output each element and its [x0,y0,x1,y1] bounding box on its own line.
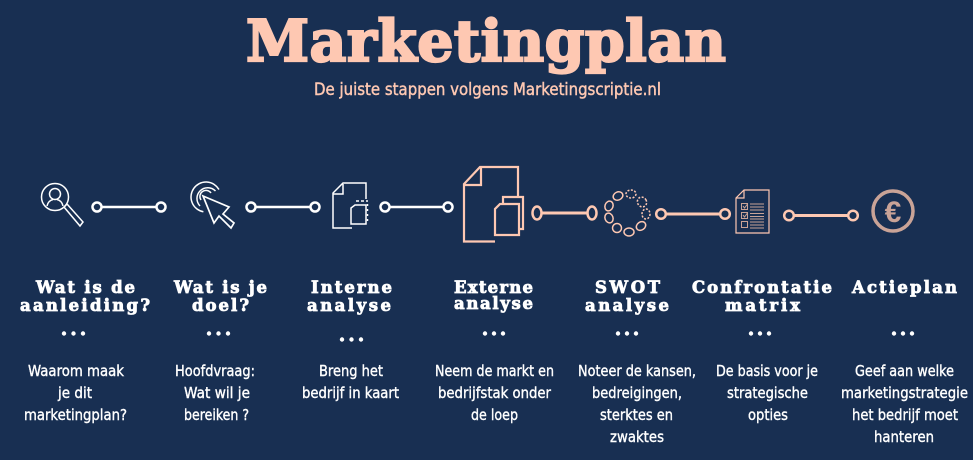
step 1 [20,278,150,424]
step 3: analyse [307,296,391,315]
connector 4 [532,206,596,220]
step 4 [435,278,554,424]
step 1: Wat is de [35,278,135,297]
step 6: Confrontatie [692,278,832,297]
step 1: je dit [57,384,92,402]
step 5 [578,278,696,446]
step 2: Hoofdvraag: [175,362,255,380]
step 3: bedrijf in kaart [302,384,399,402]
step 5: zwaktes [610,428,664,446]
step 4: Neem de markt en [435,362,554,380]
connector 1 [92,202,166,212]
step 1: Waarom maak [28,362,124,380]
connector 5 [656,209,730,219]
step 2: bereiken ? [184,406,249,424]
step 2: doel? [192,296,249,315]
icon: SWOT ring [604,190,650,236]
step 5: SWOT [595,278,661,297]
icon: euro coin [873,191,913,231]
step 3: Interne [311,278,392,297]
subtitle: De juiste stappen volgens Marketingscriptie.nl [314,80,661,99]
step 7 [841,278,968,446]
step 4: analyse [454,294,533,313]
step 5: analyse [585,296,669,315]
step 5: bedreigingen, [592,384,682,402]
step 2 [173,278,267,424]
title: Marketingplan [246,8,726,75]
step 5: sterktes en [600,406,673,424]
step 1: marketingplan? [24,406,127,424]
connector 2 [246,202,320,212]
step 6: matrix [725,296,800,315]
step 6: opties [748,406,788,424]
step 1: aanleiding? [20,296,150,315]
step 3: Breng het [319,362,383,380]
step 7: Geef aan welke [855,362,954,380]
step 4: de loep [471,406,518,424]
icon: magnifier with person [42,184,83,226]
icon: euro coin: € [885,196,902,229]
connector 6 [784,211,858,220]
step 6: strategische [727,384,808,402]
icon: document external [464,167,523,242]
step 3 [302,278,399,402]
step 5: Noteer de kansen, [578,362,696,380]
step 4: bedrijfstak onder [438,384,552,402]
icon: target with cursor [191,182,234,228]
step 7: hanteren [874,428,934,446]
step 2: Wat is je [173,278,267,297]
icon: document internal [333,183,368,228]
step 6 [692,278,832,424]
step 6: De basis voor je [716,362,818,380]
step 4: Externe [454,278,533,297]
connector 3 [380,202,452,212]
icon: checklist document [736,190,769,233]
step 2: Wat wil je [184,384,250,402]
step 7: Actieplan [851,278,957,297]
